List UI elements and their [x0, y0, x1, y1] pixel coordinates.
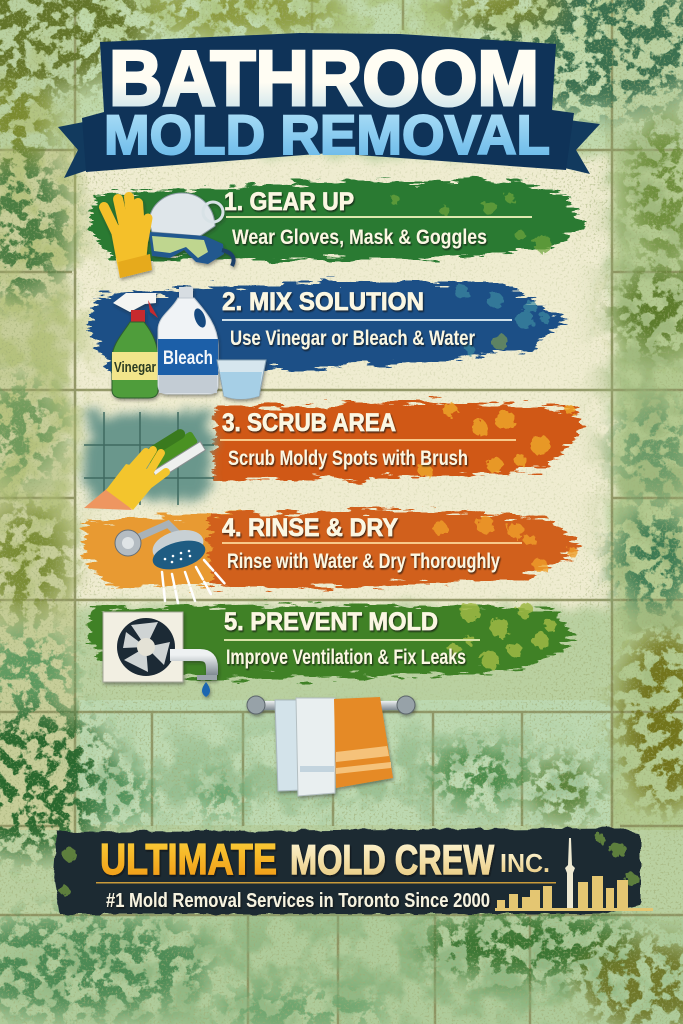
icon: vent fan and dripping faucet: [103, 612, 217, 697]
step 4 heading: 4. RINSE & DRY: [222, 514, 398, 542]
icon: tile patch with gloved hand and brush: [84, 410, 214, 510]
step 1 heading: 1. GEAR UP: [224, 188, 354, 216]
step 2 description: Use Vinegar or Bleach & Water: [230, 327, 475, 350]
panel: footer company banner: [54, 828, 653, 914]
panel: step 2 mix solution: [88, 282, 566, 399]
tagline: #1 Mold Removal Services in Toronto Since 2000: [106, 890, 490, 912]
banner tails: [58, 118, 600, 178]
orange brush stroke: [215, 402, 582, 480]
step 2 heading: 2. MIX SOLUTION: [222, 288, 424, 316]
vinegar label: Vinegar: [114, 359, 156, 376]
step 3 heading: 3. SCRUB AREA: [222, 409, 396, 437]
icon: towel rack with towels: [247, 696, 415, 796]
panel: footer company banner: INC.: [500, 848, 550, 878]
panel: step 1 gear up: [90, 180, 582, 278]
step 1 description: Wear Gloves, Mask & Goggles: [232, 226, 487, 249]
bleach label: Bleach: [163, 348, 213, 369]
heading: Mold Removal: MOLD REMOVAL: [104, 103, 550, 166]
banner backing: [82, 33, 574, 172]
orange brush stroke: [84, 509, 582, 588]
step 3 description: Scrub Moldy Spots with Brush: [228, 447, 468, 470]
panel: step 5 prevent mold: [88, 602, 574, 697]
step 5 heading: 5. PREVENT MOLD: [224, 608, 438, 636]
icon: gloves mask goggles: [104, 193, 234, 278]
panel: step 3 scrub area: [84, 402, 582, 510]
company name: Mold Crew Inc: MOLD CREW: [290, 836, 494, 883]
blue brush stroke: [88, 282, 566, 372]
icon: vinegar and bleach bottles with cup: [112, 287, 266, 399]
green brush stroke: [90, 180, 582, 260]
icon: Toronto skyline: [495, 838, 653, 911]
heading: Bathroom: BATHROOM: [109, 34, 539, 122]
title banner: [58, 33, 600, 178]
company name: Ultimate: ULTIMATE: [100, 835, 277, 884]
step 4 description: Rinse with Water & Dry Thoroughly: [227, 550, 500, 573]
step 5 description: Improve Ventilation & Fix Leaks: [226, 646, 466, 669]
green brush stroke: [88, 602, 574, 680]
panel: step 4 rinse and dry: [84, 509, 582, 603]
icon: shower head with water: [115, 524, 226, 603]
